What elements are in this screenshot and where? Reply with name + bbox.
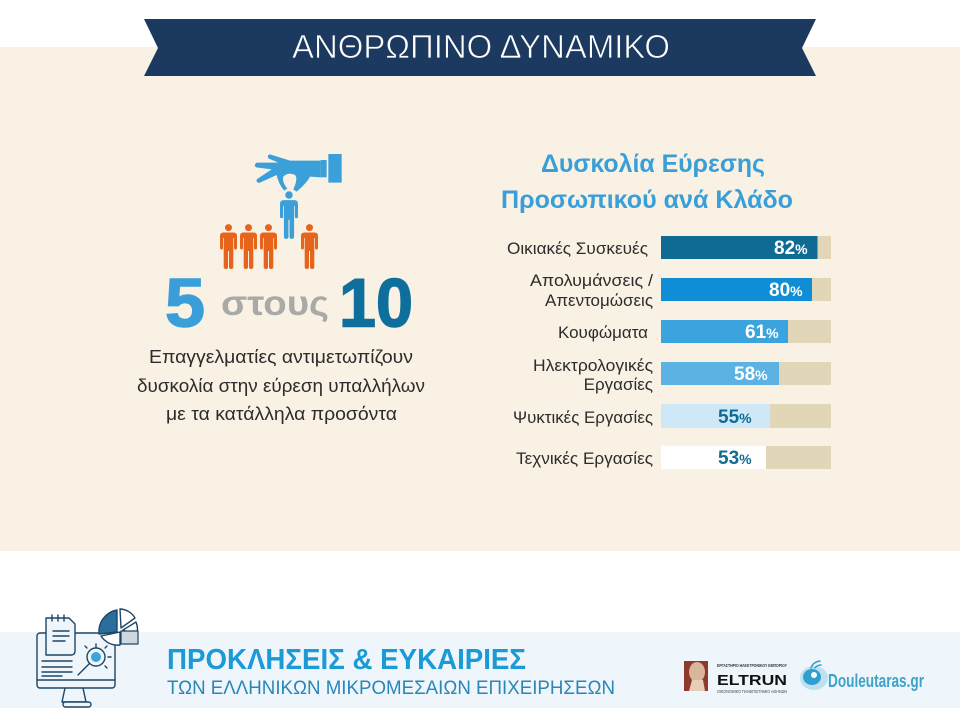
statistic: 5 στους 10: στους	[221, 284, 329, 323]
bar: Κουφώματα 61%: Κουφώματα	[558, 323, 648, 342]
bar: Τεχνικές Εργασίες 53%: 53%	[718, 448, 752, 469]
logo: ELTRUN	[684, 661, 787, 694]
bar: Οικιακές Συσκευές 82%: 82%	[774, 238, 808, 259]
logo: Douleutaras.gr	[800, 661, 924, 691]
logo: ELTRUN: ELTRUN	[717, 672, 787, 689]
bar: Απολυμάνσεις / Απεντομώσεις 80%: Απεντομώσεις	[545, 291, 653, 310]
description text	[137, 346, 425, 424]
statistic: 5 στους 10: 10	[339, 264, 413, 342]
bar chart	[507, 236, 831, 469]
bar: Απολυμάνσεις / Απεντομώσεις 80%: 80%	[769, 280, 803, 301]
statistic: 5 στους 10	[165, 264, 413, 342]
description text: με τα κατάλληλα προσόντα	[166, 403, 397, 424]
bar: Τεχνικές Εργασίες 53%	[516, 446, 831, 469]
footer title: ΠΡΟΚΛΗΣΕΙΣ & ΕΥΚΑΙΡΙΕΣ	[167, 644, 526, 676]
footer title	[167, 644, 615, 699]
bar: Ηλεκτρολογικές Εργασίες 58%: Ηλεκτρολογικές	[533, 356, 653, 375]
icon: monitor with documents and pie chart	[37, 609, 138, 707]
chart heading: Προσωπικού ανά Κλάδο	[501, 186, 793, 214]
bar: Ηλεκτρολογικές Εργασίες 58%: Εργασίες	[584, 375, 653, 394]
icon: selected person	[280, 191, 298, 239]
title banner	[144, 19, 816, 76]
description text: Επαγγελματίες αντιμετωπίζουν	[149, 346, 413, 367]
chart heading	[501, 150, 793, 214]
logo: Douleutaras.gr: Douleutaras.gr	[828, 671, 924, 691]
bar: Κουφώματα 61%: 61%	[745, 322, 779, 343]
bar: Ηλεκτρολογικές Εργασίες 58%	[533, 356, 831, 394]
logo: ELTRUN: ΕΡΓΑΣΤΗΡΙΟ ΗΛΕΚΤΡΟΝΙΚΟΥ ΕΜΠΟΡΙΟΥ	[717, 663, 787, 668]
bar: Ηλεκτρολογικές Εργασίες 58%: 58%	[734, 364, 768, 385]
footer subtitle: ΤΩΝ ΕΛΛΗΝΙΚΩΝ ΜΙΚΡΟΜΕΣΑΙΩΝ ΕΠΙΧΕΙΡΗΣΕΩΝ	[167, 678, 615, 699]
chart heading: Δυσκολία Εύρεσης	[541, 150, 765, 178]
logo: ELTRUN: ΟΙΚΟΝΟΜΙΚΟ ΠΑΝΕΠΙΣΤΗΜΙΟ ΑΘΗΝΩΝ	[717, 689, 787, 694]
bar: Οικιακές Συσκευές 82%	[507, 236, 831, 259]
title text: ΑΝΘΡΩΠΙΝΟ ΔΥΝΑΜΙΚΟ	[292, 29, 670, 66]
icon: orange people	[220, 224, 318, 269]
statistic: 5 στους 10: 5	[165, 264, 205, 342]
icon: hand picking a person from a group	[220, 154, 342, 269]
bar: Τεχνικές Εργασίες 53%: Τεχνικές Εργασίες	[516, 449, 653, 468]
description text: δυσκολία στην εύρεση υπαλλήλων	[137, 375, 425, 396]
footer band	[0, 632, 960, 708]
bar: Κουφώματα 61%	[558, 320, 831, 343]
bar: Ψυκτικές Εργασίες 55%	[513, 404, 831, 428]
bar: Απολυμάνσεις / Απεντομώσεις 80%: Απολυμάνσεις /	[530, 271, 653, 290]
icon: hand	[255, 154, 342, 192]
bar: Ψυκτικές Εργασίες 55%: Ψυκτικές Εργασίες	[513, 408, 653, 427]
bar: Ψυκτικές Εργασίες 55%: 55%	[718, 407, 752, 428]
bar: Οικιακές Συσκευές 82%: Οικιακές Συσκευές	[507, 239, 648, 258]
cream background panel	[0, 47, 960, 551]
bar: Απολυμάνσεις / Απεντομώσεις 80%	[530, 271, 831, 310]
